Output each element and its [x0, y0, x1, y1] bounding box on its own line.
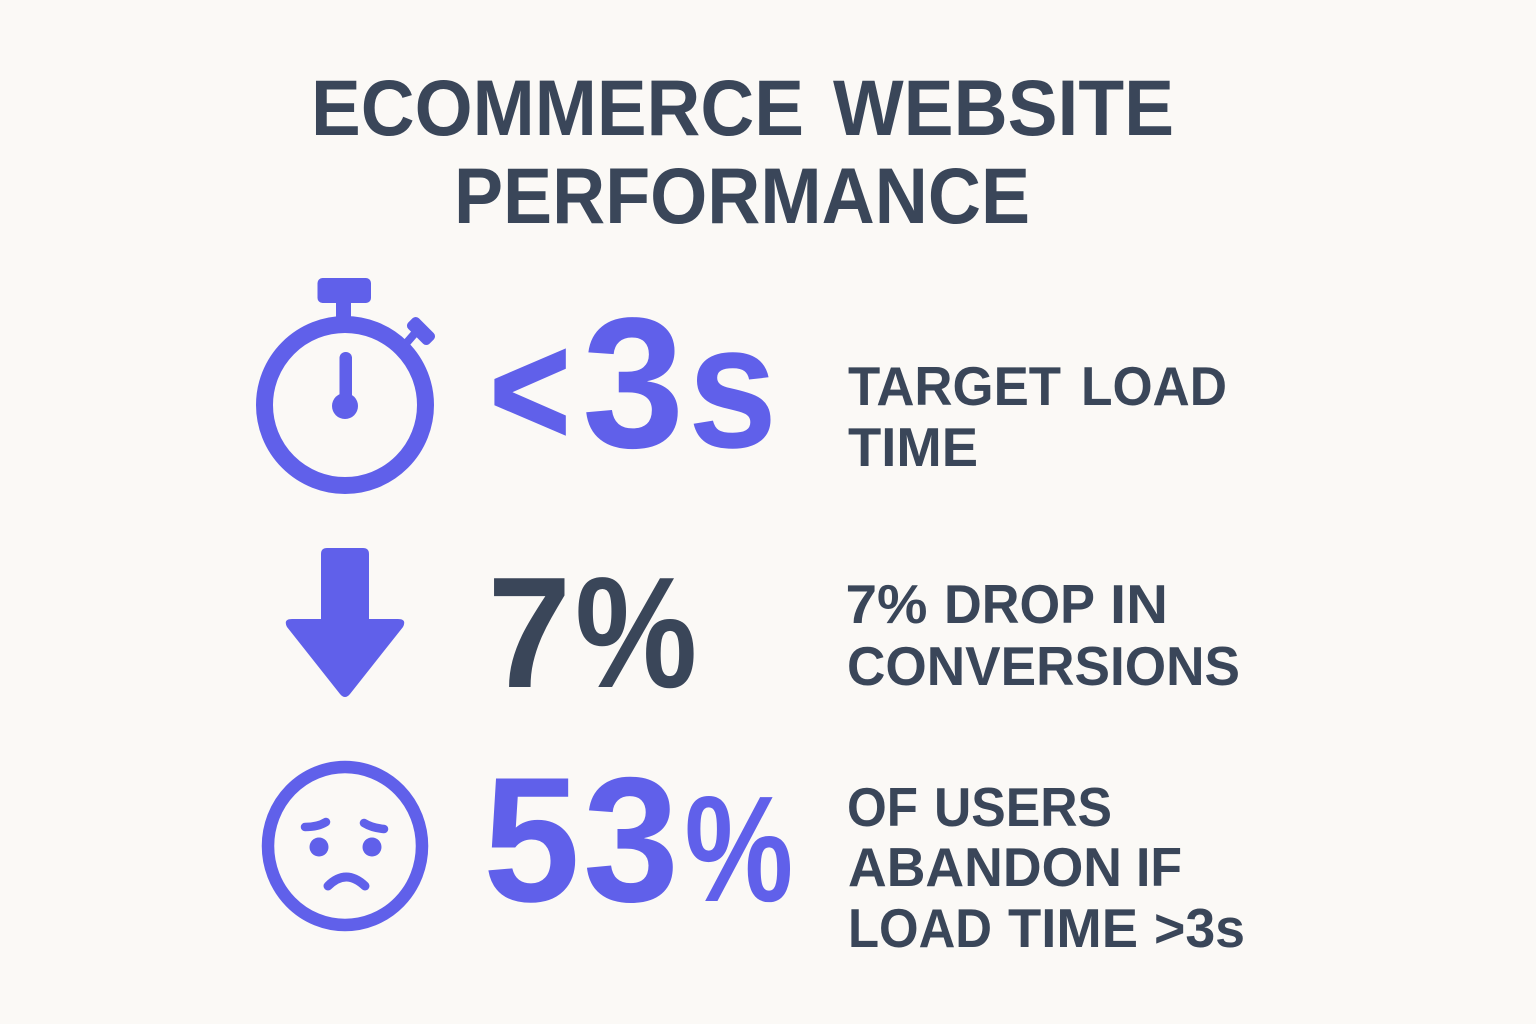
label: of users abandon: TIME	[1008, 897, 1138, 959]
stat: 53%: 5	[483, 740, 580, 939]
label: of users abandon	[847, 776, 1245, 959]
stat: 7%: %	[575, 545, 697, 721]
title: ECOMMERCE	[311, 64, 804, 152]
title: WEBSITE	[833, 64, 1174, 152]
label: target load time: TARGET	[848, 355, 1061, 417]
label: target load time	[848, 355, 1227, 478]
label: target load time: LOAD	[1081, 355, 1227, 417]
icon: down arrow	[286, 548, 404, 697]
label: of users abandon: IF	[1136, 836, 1182, 898]
stat: 53%	[483, 740, 793, 940]
label: of users abandon: USERS	[934, 776, 1112, 838]
stat: <3s: <	[490, 304, 570, 476]
stat: <3s: s	[688, 288, 777, 485]
stat: 53%: 3	[583, 741, 679, 940]
label: 7% drop in conversions: 7%	[846, 573, 928, 635]
stat: 53%: %	[684, 766, 793, 934]
label: 7% drop in conversions	[846, 573, 1240, 697]
label: of users abandon: ABANDON	[848, 836, 1122, 898]
label: of users abandon: LOAD	[848, 897, 992, 959]
title: PERFORMANCE	[454, 152, 1030, 240]
stat: <3s: 3	[582, 279, 684, 487]
title	[311, 64, 1174, 240]
label: of users abandon: >3s	[1154, 897, 1245, 959]
label: of users abandon: OF	[847, 776, 918, 838]
label: 7% drop in conversions: CONVERSIONS	[847, 635, 1240, 697]
icon: sad face	[268, 767, 422, 925]
label: 7% drop in conversions: IN	[1110, 573, 1168, 635]
label: target load time: TIME	[848, 416, 978, 478]
label: 7% drop in conversions: DROP	[944, 573, 1095, 635]
stat: 7%: 7	[488, 543, 571, 721]
stat: 7%	[488, 543, 697, 721]
icon: stopwatch	[264, 278, 437, 486]
stat: <3s	[490, 279, 777, 487]
